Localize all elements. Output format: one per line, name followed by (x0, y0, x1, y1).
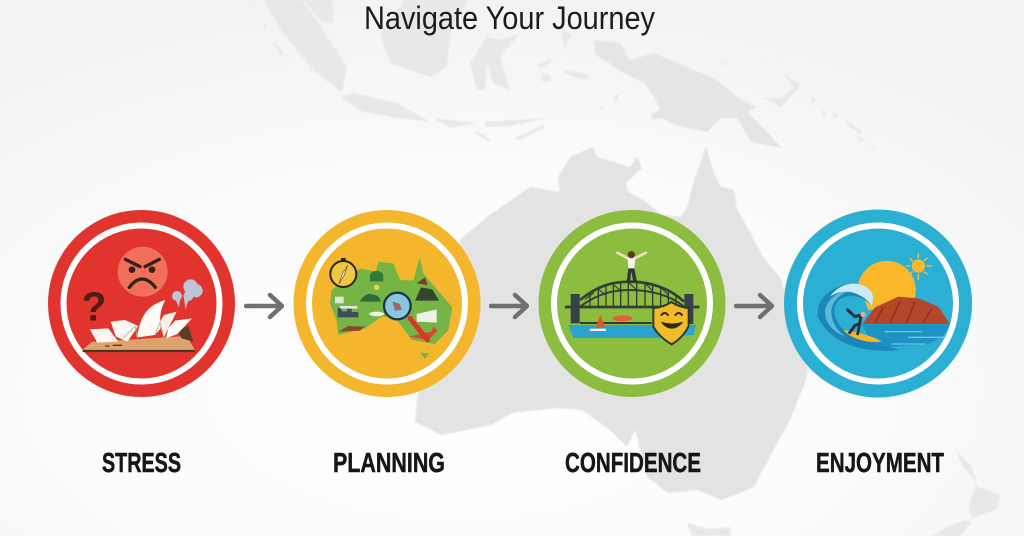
icon: smiling shield (653, 302, 689, 344)
arrow: stress to planning (246, 295, 282, 317)
icon: sailboat (590, 315, 606, 331)
map: Maluku (538, 30, 620, 111)
icon: confidence illustration (565, 251, 699, 344)
title: Navigate Your Journey (364, 0, 655, 36)
icon: sea (862, 324, 950, 348)
icon: stress illustration (82, 247, 203, 351)
map: Tasmania (687, 523, 731, 536)
icon: Uluru (862, 297, 950, 324)
map: western Sumatra islands (250, 5, 284, 56)
map: New Zealand (931, 450, 1001, 536)
label: enjoyment: ENJOYMENT (816, 447, 944, 478)
step 1: stress badge (48, 210, 235, 397)
label: planning: PLANNING (333, 447, 445, 478)
icon: large sun (858, 261, 916, 310)
map: Solomon Islands (720, 60, 877, 149)
map: Sulawesi (470, 33, 520, 90)
map: Lesser Sunda Islands (433, 118, 547, 141)
icon: surfboard (843, 330, 882, 342)
icon: Sydney Harbour Bridge (565, 282, 699, 324)
arrow: planning to confidence (491, 295, 527, 317)
map: Borneo (380, 0, 468, 77)
icon: Australia map (330, 257, 452, 359)
icon: harbour water (568, 325, 696, 338)
map: Malay Peninsula (303, 0, 333, 23)
step 3: confidence badge (538, 210, 726, 397)
map: Sumatra (263, 0, 347, 93)
map: Australia (415, 147, 808, 500)
step 4: enjoyment badge (784, 210, 972, 398)
map: Java (340, 93, 430, 122)
icon: magnifying glass (384, 293, 428, 340)
arrow: confidence to enjoyment (736, 295, 772, 317)
icon: angry face (118, 247, 168, 297)
background map (250, 0, 1001, 536)
label: confidence: CONFIDENCE (565, 447, 701, 478)
step 2: planning badge (294, 210, 480, 397)
icon: planning illustration (330, 257, 452, 359)
map: New Britain (762, 72, 801, 107)
icon: compass (330, 258, 356, 287)
map: New Guinea (593, 40, 782, 148)
icon: small sun (906, 254, 932, 279)
label: stress: STRESS (102, 447, 181, 478)
icon: surfer (848, 310, 866, 334)
icon: breaking wave (818, 284, 900, 351)
icon: ferry (612, 315, 632, 321)
icon: enjoyment illustration (818, 254, 950, 351)
icon: question mark: ? (82, 284, 106, 330)
icon: person with raised arms (617, 251, 646, 282)
icon: Sydney Opera House (82, 300, 195, 351)
icon: smoke (172, 279, 203, 309)
